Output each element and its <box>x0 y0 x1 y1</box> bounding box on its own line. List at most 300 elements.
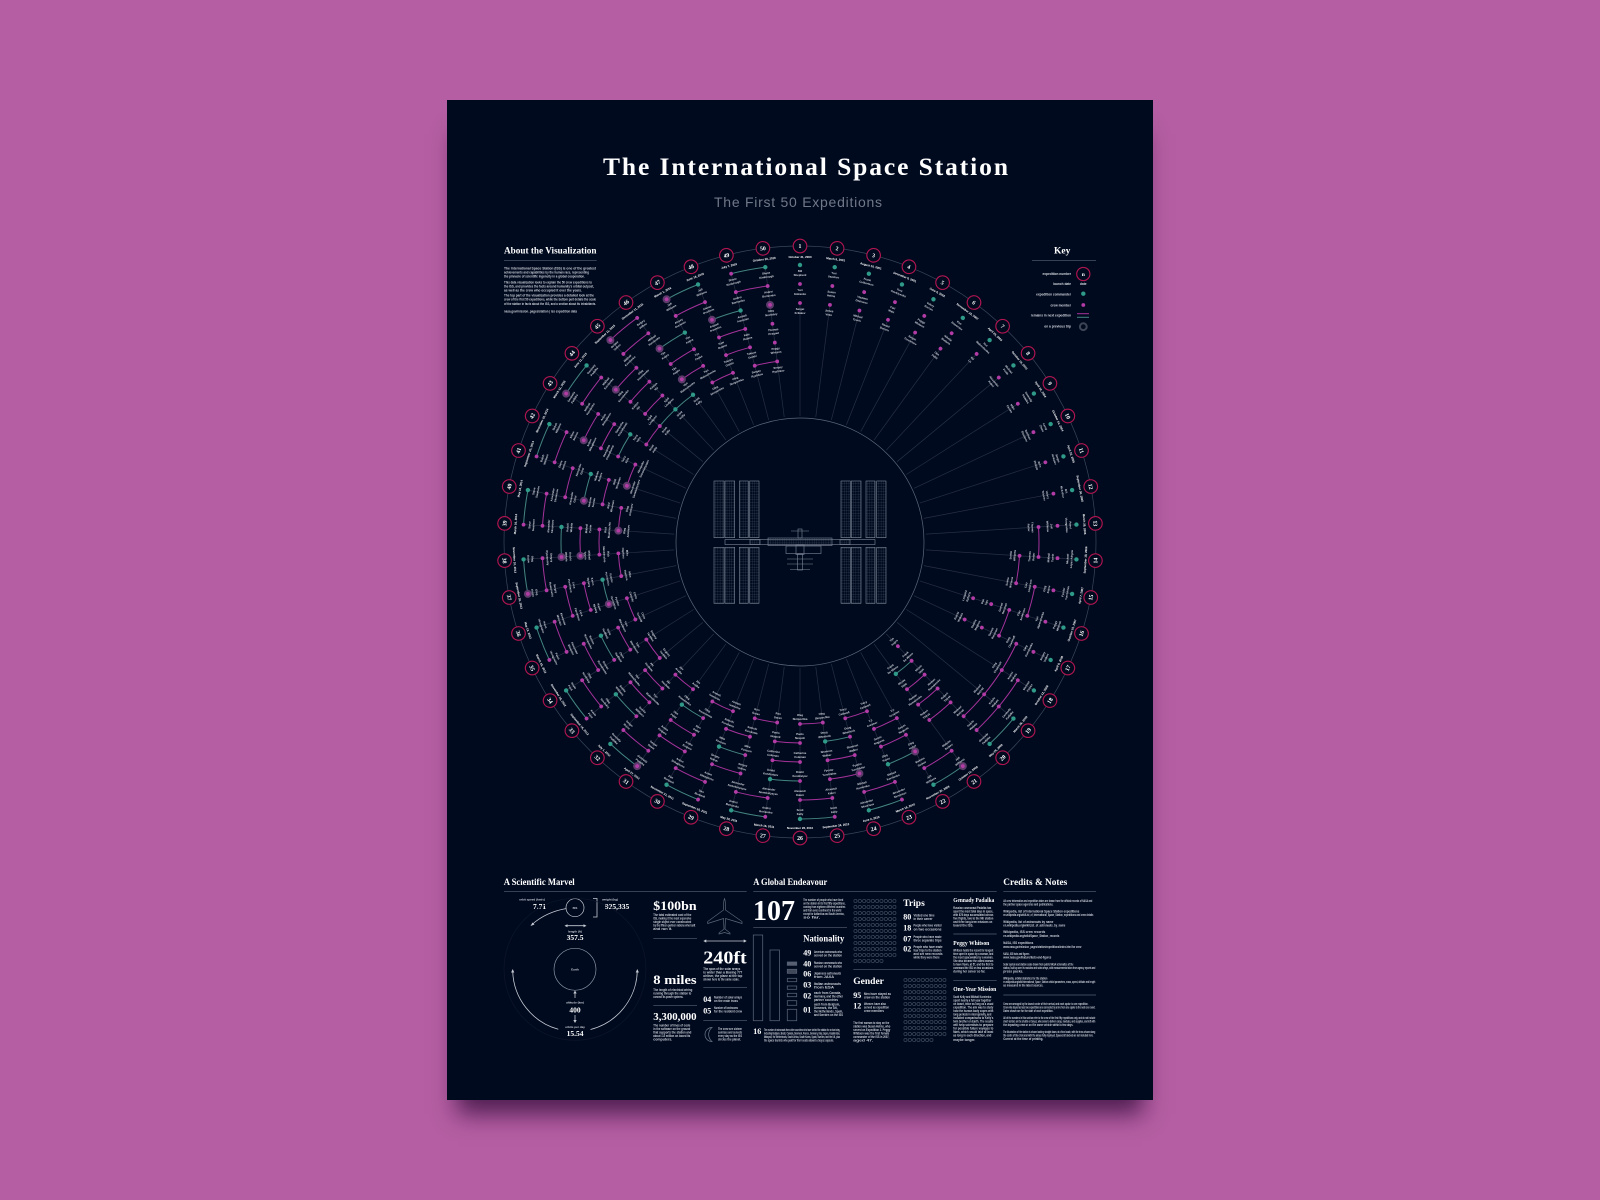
expedition 30: Dan <box>668 774 674 780</box>
expedition 34: 34 <box>545 697 553 705</box>
list: trips: three separate trips <box>914 938 942 942</box>
expedition 32: Joe <box>678 665 685 672</box>
expedition 45: Kjell <box>663 396 670 403</box>
expedition 28 <box>715 705 767 838</box>
expedition 35: Tom <box>623 620 630 628</box>
expedition 45: Kelly <box>678 412 686 420</box>
expedition 45: Mikhail <box>623 353 632 363</box>
column: profiles: board the ISS. <box>953 924 973 928</box>
column: profiles: and three long-term missions on <box>953 920 992 924</box>
expedition 44: Kimiya <box>631 400 640 410</box>
expedition 42: Alexander <box>636 459 646 474</box>
expedition 35: Alexander <box>570 641 580 656</box>
stat: 240ft: 04 <box>703 995 711 1004</box>
expedition 19: Koichi <box>988 696 996 705</box>
expedition 23: Creamer <box>866 720 879 728</box>
expedition 2: Susan <box>827 289 836 295</box>
panel: key: Key <box>1054 246 1071 256</box>
expedition 39: Mikhail <box>584 524 589 533</box>
expedition 31: Acaba <box>691 681 701 690</box>
expedition 20 <box>884 632 1014 769</box>
expedition 43: Cristoforetti <box>617 421 629 437</box>
column: profiles: the most spacewalks by a woman. <box>953 956 993 960</box>
expedition 7 <box>962 315 1014 369</box>
expedition 21: Romanenko <box>908 694 923 707</box>
expedition 26: Dmitri <box>796 770 804 774</box>
expedition 28: Fossum <box>741 747 753 754</box>
expedition 34: Ford <box>567 684 574 692</box>
stat: cost: by the fifteen partner nations who built <box>653 924 696 928</box>
expedition 12: Valery <box>1045 490 1050 500</box>
expedition 7: Ed <box>970 356 975 361</box>
expedition 37: September 10, 2013 <box>515 582 524 610</box>
list: gender: The first woman to stay on the <box>853 1021 889 1025</box>
expedition 15: Kotov <box>1046 585 1051 594</box>
expedition 5 <box>902 273 954 347</box>
expedition 21: October 11, 2009 <box>958 765 979 782</box>
expedition 6: 6 <box>970 300 976 307</box>
column: profiles: to have flown, at 57, and the first to <box>953 962 993 966</box>
expedition 39: Mastracchio <box>607 522 612 538</box>
expedition 50: Andrei <box>764 289 773 295</box>
expedition 24: Walker <box>849 747 859 753</box>
note: sixteen: The number of astronauts from other countries who have visited the station for a short stay, <box>764 1028 840 1032</box>
expedition 23: Soichi <box>873 735 882 742</box>
expedition 36 <box>509 586 640 644</box>
expedition 1: Gidzenko <box>794 292 807 296</box>
expedition 13: March 29, 2006 <box>1082 514 1087 535</box>
expedition 24: June 2, 2010 <box>862 815 880 823</box>
expedition 9: April 19, 2004 <box>1034 380 1048 399</box>
expedition 34: Romanenko <box>597 660 609 675</box>
expedition 24 <box>834 705 884 837</box>
expedition 50: Whitson <box>770 350 782 355</box>
expedition 31: Joe <box>695 679 702 685</box>
column: profiles: how the human body copes with <box>953 1009 993 1013</box>
expedition 13: Williams <box>1045 521 1050 533</box>
panel: about the visualization: This data visualization looks to explain the 50 crew expeditions to <box>504 280 592 284</box>
expedition 18: Greg <box>991 661 998 669</box>
panel: a scientific marvel: A Scientific Marvel <box>504 878 575 888</box>
expedition 24: Alexander <box>860 798 874 805</box>
expedition 32: Padalka <box>609 735 619 746</box>
expedition 29: Anatoli <box>731 699 742 707</box>
expedition 32: 32 <box>593 754 601 763</box>
stat: cost: $100bn <box>653 898 697 913</box>
expedition 39: Tyurin <box>588 524 592 533</box>
length arrow <box>703 939 747 943</box>
crew connections <box>521 265 1040 821</box>
expedition 28: Ron <box>754 707 760 712</box>
expedition 29: Burbank <box>694 791 706 799</box>
expedition 31: Kuipers <box>657 727 668 736</box>
panel: credits and notes: Wikipedia, list of International Space Station expeditions <box>1003 910 1079 914</box>
expedition 16: Eyharts <box>965 591 972 602</box>
expedition 35: Chris <box>606 628 613 636</box>
expedition 49: July 7, 2016 <box>721 262 738 270</box>
list: nationality <box>803 935 845 1017</box>
list: nationality: Japanese astronauts <box>814 972 841 976</box>
expedition 11 <box>1031 440 1091 475</box>
expedition 26: Catherine <box>794 751 807 755</box>
expedition 1: Yuri <box>797 288 803 292</box>
expedition 26: Paolo <box>796 732 804 736</box>
stat: 240ft: airliner, the plane at the top <box>703 974 742 978</box>
expedition 45: Kononenko <box>636 368 650 382</box>
expedition 35: Cassidy <box>636 612 644 623</box>
expedition 31: Sergei <box>649 739 658 748</box>
expedition 12: September 30, 2005 <box>1075 475 1085 503</box>
expedition 49: 49 <box>723 253 730 260</box>
expedition 39: Oleg <box>622 527 627 534</box>
expedition 33: Ford <box>587 712 594 719</box>
expedition 15: Anderson <box>1027 579 1033 593</box>
expedition 38: Oleg <box>530 556 535 562</box>
expedition 41: September 10, 2014 <box>523 440 535 467</box>
expedition 48: Anatoli <box>709 322 720 329</box>
expedition 20: Thirsk <box>943 694 952 703</box>
expedition 33: Williams <box>615 686 625 697</box>
column: profiles: spent the most total days in space, <box>953 910 993 914</box>
expedition 28: Mike <box>744 744 751 749</box>
expedition 4: Carl <box>890 305 896 311</box>
expedition 19: Wakata <box>990 698 1000 708</box>
panel: credits and notes: Wikipedia, ISS crew records <box>1003 930 1046 934</box>
expedition 32: Yuri <box>652 693 659 699</box>
list: nationality: Denmark, the UK, <box>814 1006 838 1010</box>
stat: cost: The total estimated cost of the <box>653 913 691 917</box>
expedition 20: Roman <box>927 677 936 687</box>
expedition 36: 36 <box>514 630 521 638</box>
expedition 46: Kelly <box>695 399 703 406</box>
expedition 22: Noguchi <box>898 726 910 735</box>
expedition 43: 43 <box>547 380 555 388</box>
stat: wiring <box>653 972 697 1006</box>
expedition 44: June 11, 2015 <box>573 352 588 369</box>
expedition 48: Rubins <box>718 343 728 350</box>
expedition 19: Gennady <box>1001 707 1012 719</box>
column: profiles: Peggy Whitson <box>953 940 990 947</box>
expedition 47: Skripochka <box>710 386 725 396</box>
expedition 22: Oleg <box>907 740 915 747</box>
expedition 46 <box>612 289 711 412</box>
expedition 13: 13 <box>1091 520 1098 527</box>
expedition 34: Marshburn <box>629 640 640 654</box>
stat: 240ft: The span of the solar arrays <box>703 967 740 971</box>
panel: a global endeavour: A Global Endeavour <box>753 878 828 888</box>
stat: 240ft: on the main truss <box>714 999 738 1003</box>
expedition 4: Onufriyenko <box>890 289 907 299</box>
expedition 29: Ivanishin <box>729 703 741 711</box>
expedition 45: Volkov <box>613 342 622 352</box>
expedition 14: Michael <box>1065 553 1070 564</box>
expedition 16: Peggy <box>1052 620 1058 629</box>
expedition 21: Robert <box>919 708 929 717</box>
expedition 23 <box>853 697 921 827</box>
panel: credits and notes: Crew are arranged by the launch order of their arrival, and each spoke is one expedition. <box>1003 1002 1088 1006</box>
expedition 2: 2 <box>835 246 839 252</box>
expedition 31: April 27, 2012 <box>623 766 641 781</box>
expedition 19: Barratt <box>976 686 985 696</box>
expedition 40: Maksim <box>587 496 593 507</box>
panel: credits and notes: the partner space agencies and publications. <box>1003 902 1053 906</box>
expedition 6: Bowersox <box>951 320 964 332</box>
expedition 10: Sharipov <box>1020 430 1029 443</box>
stat: sunrises <box>718 1027 742 1042</box>
stat: cost: and run it. <box>653 927 672 931</box>
expedition 47: Kopra <box>685 337 694 345</box>
dot grid: gender <box>903 977 947 1043</box>
expedition 36: May 13, 2013 <box>523 621 533 640</box>
expedition 27: Ron <box>775 711 782 716</box>
expedition 3: Frank <box>863 277 872 282</box>
expedition 46: Malenchenko <box>679 380 696 394</box>
expedition 38: Sergey <box>549 553 554 563</box>
expedition 4: December 5, 2001 <box>893 271 917 284</box>
expedition 47: Jeff <box>666 302 673 307</box>
panel: credits and notes: NASA, ISS expeditions <box>1003 941 1033 945</box>
expedition 46: Peake <box>672 368 681 376</box>
expedition 24: Fyodor <box>852 761 863 768</box>
list: nationality: 40 <box>803 960 811 969</box>
list: gender: crew members <box>864 1009 884 1013</box>
expedition 23: Oleg <box>881 753 889 759</box>
expedition 22: Maksim <box>915 756 926 764</box>
panel: key: crew member <box>1050 304 1072 308</box>
expedition 37: Sergey <box>553 584 558 594</box>
panel: credits and notes: as measured in the latest sources. <box>1003 984 1043 988</box>
expedition 14: Mikhail <box>1046 553 1051 562</box>
expedition 48: 48 <box>688 264 695 272</box>
expedition 29: Fossum <box>715 738 727 746</box>
expedition 2: James <box>825 308 834 313</box>
expedition 49 <box>717 247 766 379</box>
expedition 14: Williams <box>1012 549 1017 561</box>
expedition 44: Padalka <box>589 366 599 377</box>
expedition 43: Kelly <box>651 445 658 454</box>
expedition 35: Roman <box>588 635 596 645</box>
expedition 41: Alexander <box>629 480 637 495</box>
expedition 20: Padalka <box>981 735 992 745</box>
expedition 5: Peggy <box>917 317 926 325</box>
list: trips: 02 <box>903 945 911 954</box>
expedition 49: Andrei <box>733 295 742 301</box>
expedition 18: October 12, 2008 <box>1034 684 1050 706</box>
expedition 7: April 25, 2003 <box>987 326 1004 342</box>
expedition 33: Hoshide <box>644 661 654 673</box>
expedition 22: Williams <box>925 776 937 785</box>
expedition 23: Kornienko <box>886 773 900 782</box>
expedition 22: November 30, 2009 <box>925 784 951 801</box>
expedition 10: Chiao <box>1038 424 1045 433</box>
panel: credits and notes: www.nasa.gov/mission_pages/station/expeditions/index.html for crew <box>1003 945 1082 949</box>
expedition 30: Burbank <box>663 776 675 785</box>
orbit diagram: altitude (km) <box>566 1000 584 1004</box>
expedition 2: Yuri <box>831 271 837 275</box>
expedition 18: Fincke <box>1026 683 1034 692</box>
expedition 45: Yui <box>653 386 659 392</box>
expedition 40: May 13, 2014 <box>516 479 524 498</box>
expedition 44: Oleg <box>617 390 624 397</box>
expedition 44: Kelly <box>664 428 671 436</box>
panel: credits and notes: www.nasa.gov/feature/facts-and-figures <box>1003 956 1051 960</box>
expedition 14: 14 <box>1093 557 1100 564</box>
expedition 29: Dan <box>698 788 705 794</box>
expedition 18: Wakata <box>1009 672 1018 683</box>
column: profiles: with 878 days accumulated across <box>953 913 993 917</box>
expedition 18: Koichi <box>1006 671 1014 680</box>
expedition 33: Kevin <box>590 709 598 717</box>
expedition 26: Alexandr <box>794 789 807 793</box>
list: gender: served as expedition <box>864 1006 889 1010</box>
expedition 27: March 16, 2011 <box>754 822 775 829</box>
expedition 24: 24 <box>870 826 878 833</box>
panel: credits and notes: The illustration of the station is shown looking straight down, at a fixed scale, with the truss shown along <box>1003 1030 1095 1034</box>
expedition 49: Takuya <box>747 350 757 356</box>
column: profiles: Whitson holds the record for longest <box>953 948 994 952</box>
expedition 45: 45 <box>594 323 602 331</box>
expedition 29: Sergey <box>710 752 721 760</box>
expedition 33: Yuri <box>634 673 641 680</box>
expedition 5: Valery <box>926 301 935 308</box>
outer ring <box>504 246 1096 838</box>
expedition 28: Volkov <box>737 766 747 772</box>
expedition 30: Ivanishin <box>709 692 721 702</box>
panel: credits and notes: press packs. <box>1003 970 1023 974</box>
orbit diagram <box>504 898 646 1040</box>
expedition 23: Skvortsov <box>893 790 907 799</box>
expedition 14: September 18, 2006 <box>1083 546 1088 574</box>
expedition 38: Mastracchio <box>602 546 607 563</box>
list: nationality: from ESA <box>814 986 835 990</box>
expedition 32: Revin <box>623 722 631 731</box>
stat: sunrises: The crew see sixteen <box>718 1027 742 1031</box>
stat: lines of code: in the software on the ground <box>653 1027 690 1031</box>
expedition 43: Terry <box>632 433 639 441</box>
expedition 36: Vinogradov <box>537 618 546 634</box>
expedition 23: T.J. <box>868 718 874 723</box>
expedition 16: Clay <box>1016 609 1022 616</box>
expedition 14 <box>1008 541 1103 574</box>
stat: 107 astronauts: so far. <box>803 916 821 920</box>
expedition 25: Oleg <box>818 711 825 716</box>
expedition 17 <box>951 607 1078 679</box>
expedition 25 <box>808 710 852 844</box>
expedition 40: Reid <box>606 502 611 509</box>
expedition 26: Oleg <box>797 713 803 717</box>
expedition 31: Pettit <box>670 712 678 720</box>
list: gender <box>853 977 891 1042</box>
expedition 36: Fyodor <box>614 596 621 607</box>
list: nationality: 01 <box>803 1006 811 1015</box>
expedition 39: 39 <box>502 520 509 527</box>
expedition 38: Hopkins <box>621 548 626 559</box>
expedition 23: Kotov <box>882 756 891 763</box>
expedition 49: Onishi <box>748 354 757 360</box>
expedition 41: Alexander <box>574 462 583 477</box>
list: trips: 18 <box>903 924 911 933</box>
expedition 47: Williams <box>665 303 678 312</box>
expedition 3: Culbertson <box>859 279 874 287</box>
panel: credits and notes: Credits & Notes <box>1003 878 1068 888</box>
expedition 26: Coleman <box>794 755 806 759</box>
expedition 22: T.J. <box>890 707 896 713</box>
expedition 28: May 23, 2011 <box>720 815 738 823</box>
expedition 41: 41 <box>516 447 523 455</box>
expedition 50: Kimbrough <box>759 274 774 280</box>
expedition 18: 18 <box>1047 697 1055 705</box>
expedition 10: 10 <box>1063 412 1071 420</box>
radial spokes <box>524 267 1076 819</box>
expedition 27: Kondratyev <box>763 771 779 777</box>
expedition 37: Luca <box>572 582 577 589</box>
panel: key <box>1031 246 1096 330</box>
column: profiles: spent nearly a full year together <box>953 998 992 1002</box>
expedition 15 <box>1004 572 1099 607</box>
expedition 42: Butch <box>551 422 558 431</box>
expedition 43: Samantha <box>614 420 625 434</box>
expedition 45: September 11, 2015 <box>594 323 616 345</box>
title: The International Space Station <box>603 152 1008 181</box>
expedition 39: Wakata <box>569 522 574 532</box>
expedition 13: Jeff <box>1049 524 1054 529</box>
expedition 48: June 18, 2016 <box>686 272 705 282</box>
expedition 24: Skvortsov <box>861 802 875 809</box>
expedition 23: Caldwell <box>859 703 871 710</box>
expedition 31 <box>614 675 707 793</box>
expedition 4: Walz <box>888 308 896 314</box>
stat: lines of code: computers. <box>653 1038 672 1042</box>
expedition 40: Alexander <box>549 487 556 502</box>
expedition 46: Tim <box>660 350 667 357</box>
expedition 41: Gerst <box>579 467 585 475</box>
expedition 16: Whitson <box>1055 620 1062 632</box>
expedition 21: Roman <box>908 693 918 702</box>
expedition 20: Romanenko <box>927 678 942 692</box>
expedition 33: Evgeny <box>662 647 672 658</box>
expedition 20: 20 <box>999 754 1008 763</box>
expedition 14: Thomas <box>1027 551 1032 562</box>
expedition 9: Padalka <box>1021 393 1030 405</box>
expedition 29: 29 <box>687 814 695 822</box>
expedition 49: Kimbrough <box>726 279 741 287</box>
expedition 34: Novitskiy <box>581 671 592 684</box>
expedition 19: Padalka <box>1005 710 1015 721</box>
expedition 39: Alexander <box>546 518 551 533</box>
expedition 46: 46 <box>622 299 631 307</box>
panel: about the visualization: nasa.gov/mission_pages/station | iss expedition data <box>504 310 577 314</box>
expedition 40: Steve <box>531 487 537 495</box>
stat: lines of code: The number of lines of code <box>653 1024 690 1028</box>
expedition 42: Shkaplerov <box>588 436 598 452</box>
expedition 47: 47 <box>654 279 662 288</box>
expedition 42: Samantha <box>602 444 611 458</box>
column: profiles: maybe longer. <box>953 1038 975 1042</box>
stat: cost: single object ever constructed <box>653 920 691 924</box>
expedition 39 <box>497 512 631 542</box>
expedition 29: Furukawa <box>721 720 735 729</box>
expedition 23: Mikhail <box>887 770 897 777</box>
expedition 41: Wiseman <box>614 476 622 489</box>
expedition 37 <box>500 561 635 612</box>
panel: credits and notes: short visitors on the shuttle or Soyuz, who came to deliver cargo, modules, and supplies, and left with <box>1003 1020 1095 1024</box>
expedition 10: October 14, 2004 <box>1051 409 1065 432</box>
expedition 44: Kjell <box>646 414 653 421</box>
expedition 23: March 18, 2010 <box>895 802 916 814</box>
expedition 47: March 1, 2016 <box>653 286 672 299</box>
expedition 19: Michael <box>972 683 982 694</box>
expedition 1: Shepherd <box>794 273 807 277</box>
